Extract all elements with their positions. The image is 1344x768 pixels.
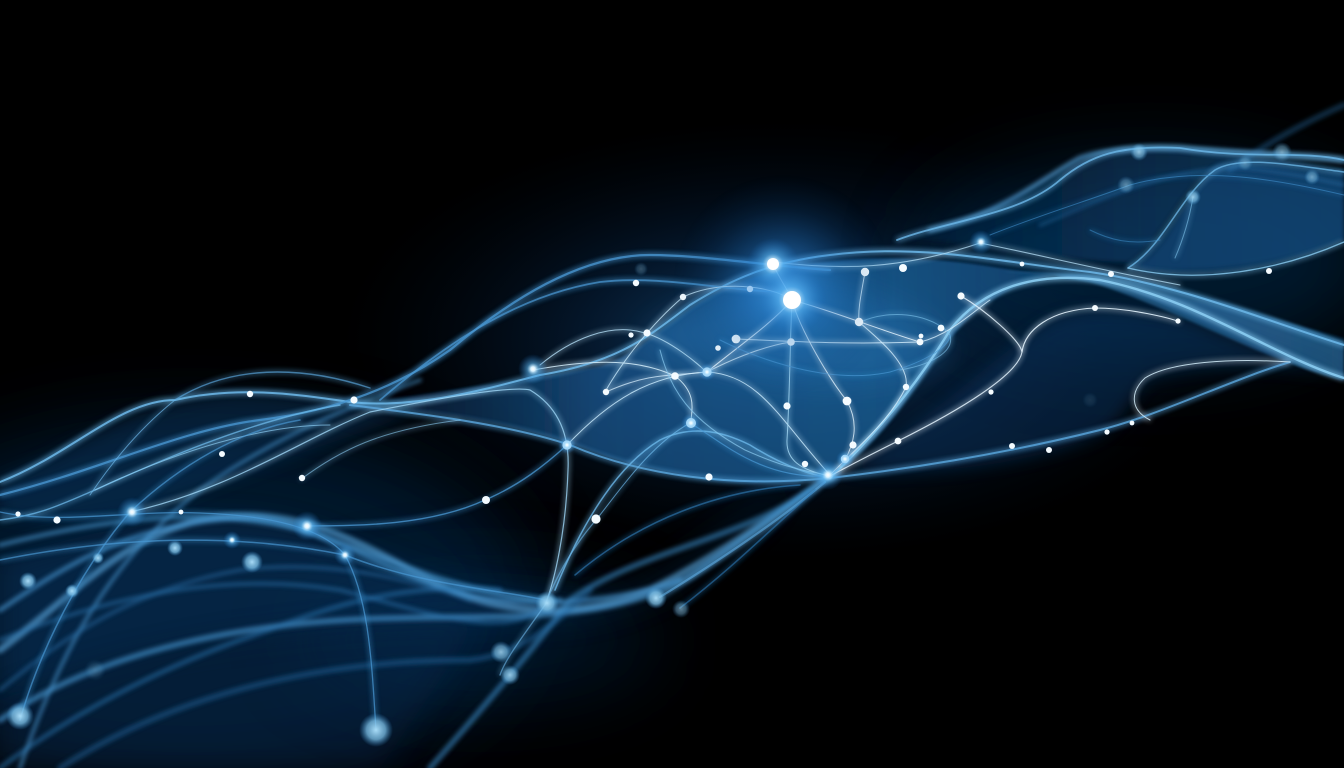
ribbon: lower right veil	[845, 310, 1344, 472]
ribbon: central mesh band	[345, 258, 1344, 483]
strands: main bright flowing lines	[0, 147, 1344, 730]
focal glow: bright star nodes	[673, 175, 893, 395]
ribbon: left haze	[0, 392, 790, 768]
network nodes: sharp white	[15, 262, 1272, 524]
ribbon: upper right	[900, 149, 1344, 274]
network nodes: glowing halos	[117, 230, 993, 566]
network nodes: out-of-focus	[6, 142, 1320, 747]
